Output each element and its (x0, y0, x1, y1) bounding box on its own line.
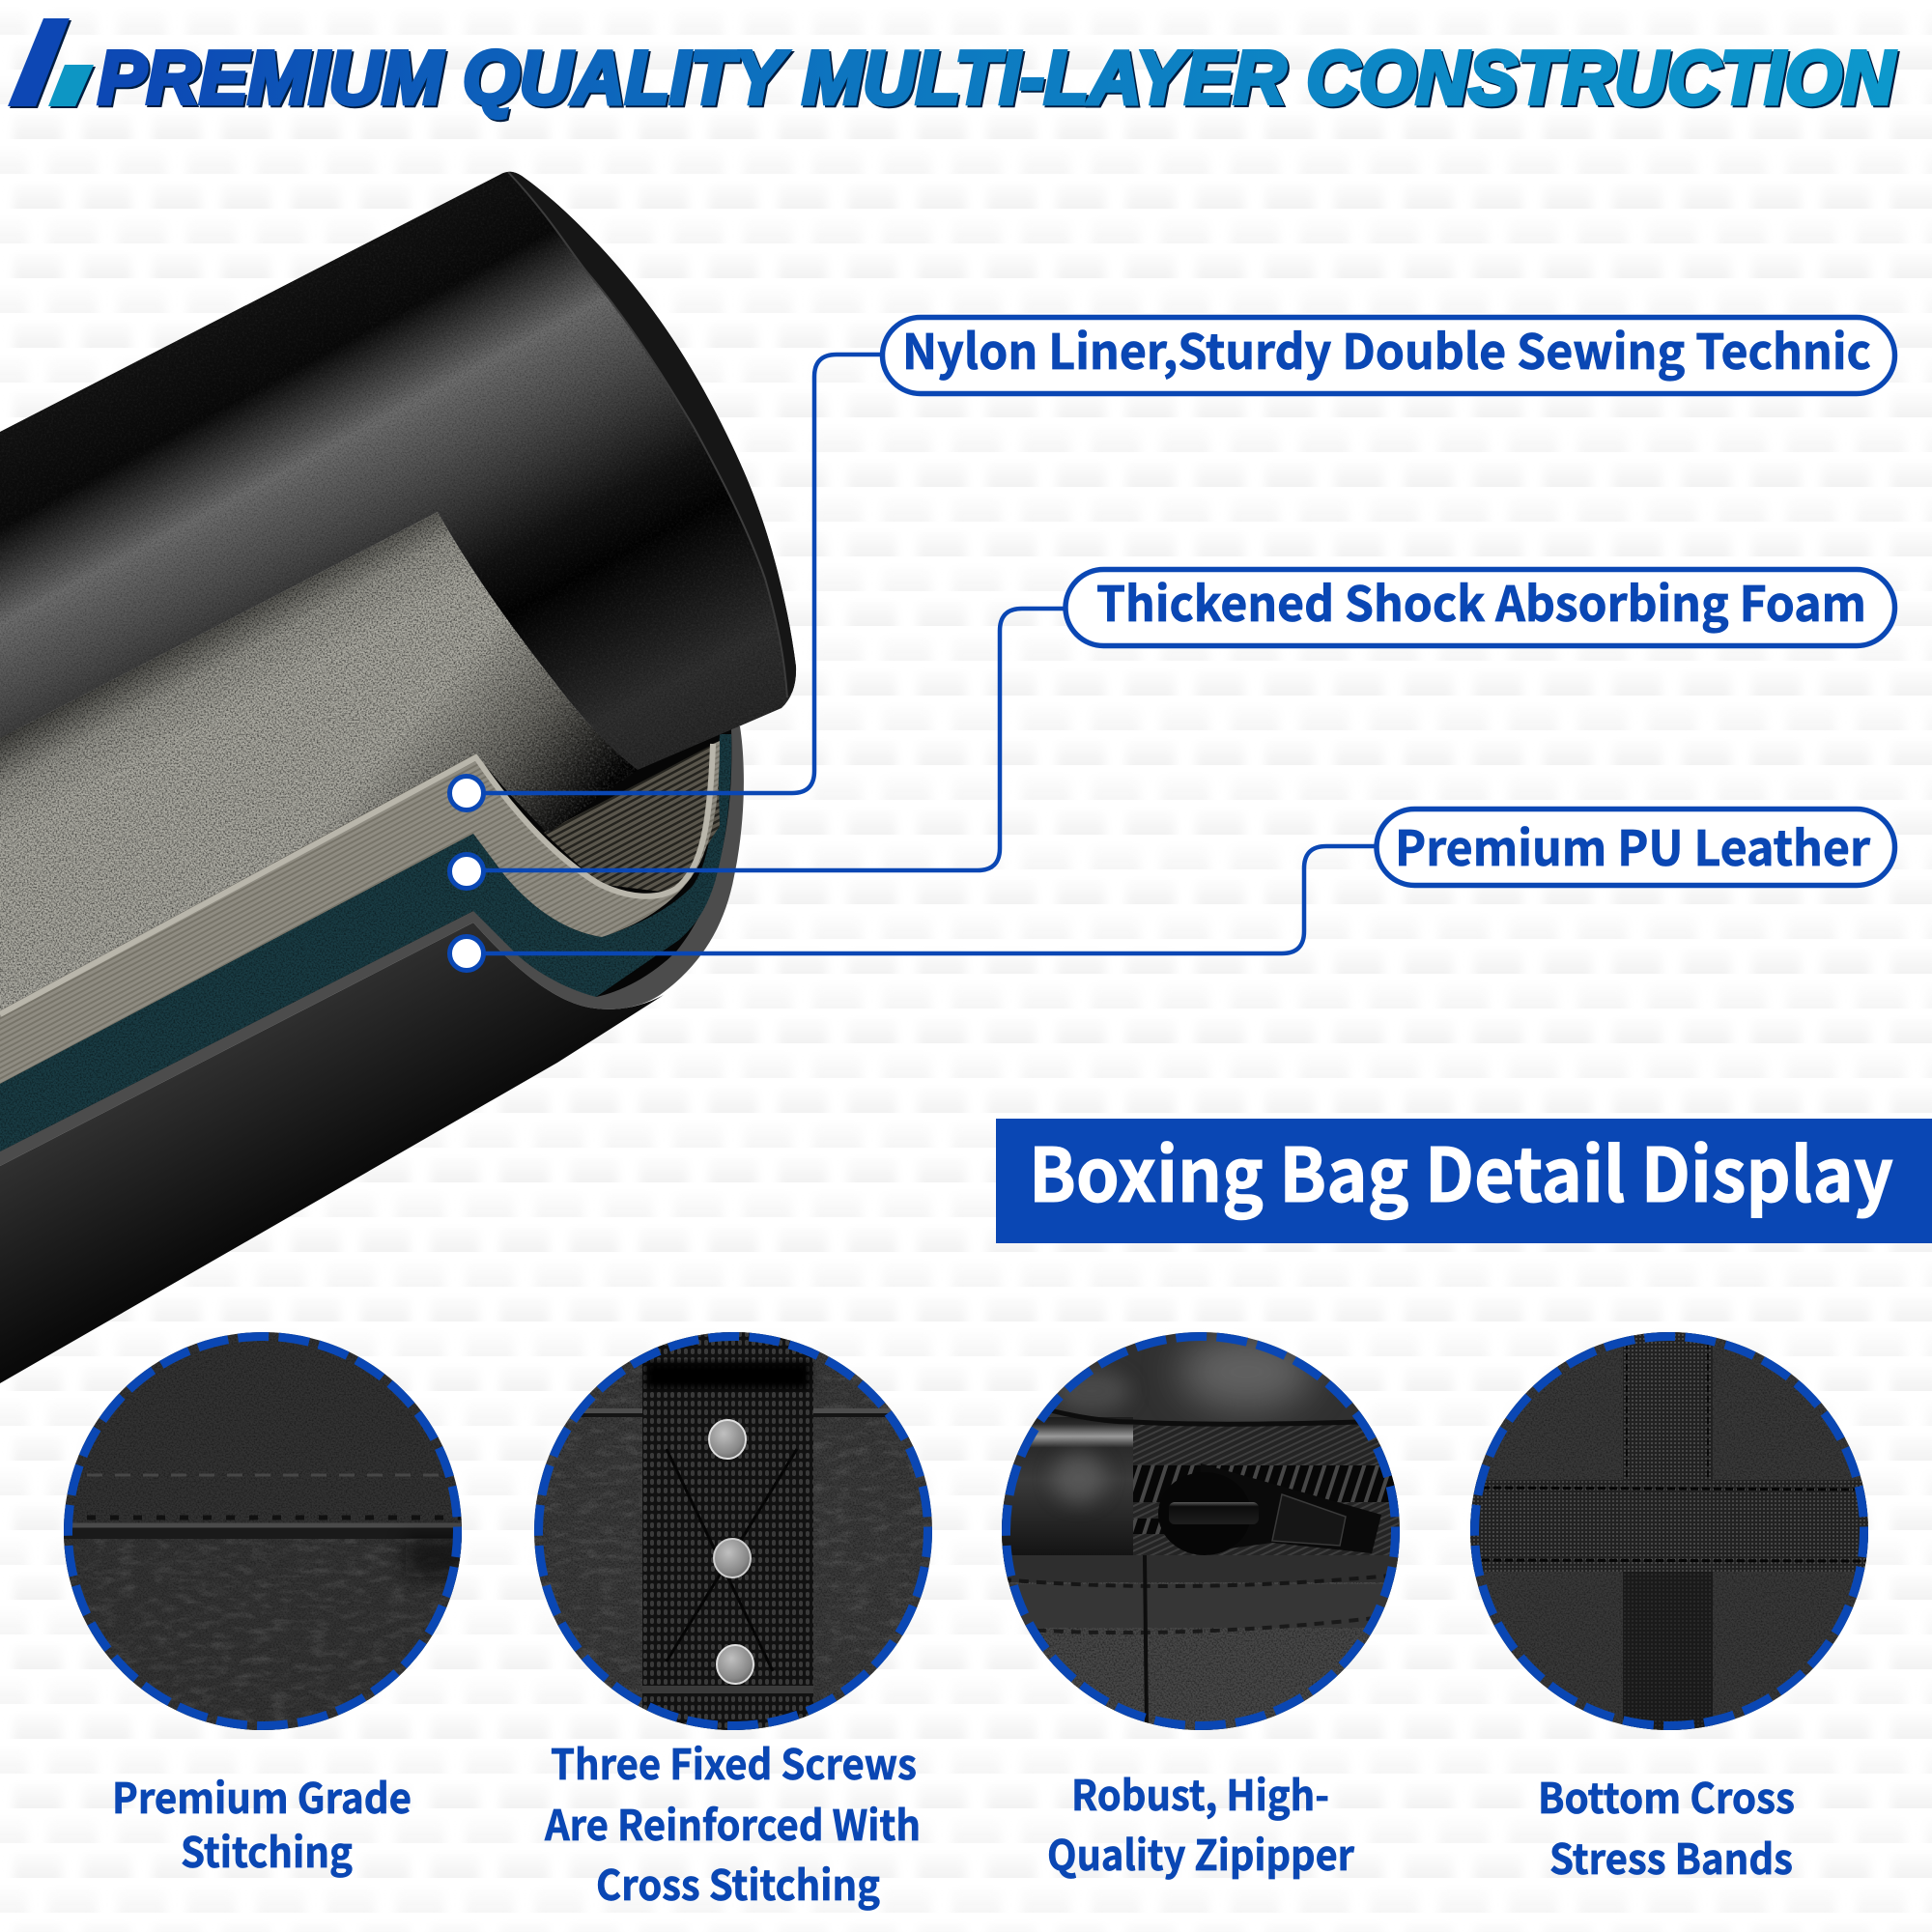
detail photo: stitching (64, 1332, 473, 1730)
caption: three fixed screws: Three Fixed Screws (551, 1732, 917, 1792)
nylon liner edge highlight (0, 744, 713, 1014)
nylon liner striped layer (0, 741, 720, 1084)
callout: nylon liner: Nylon Liner,Sturdy Double Sewing Technic (902, 314, 1871, 384)
caption: zipper (1047, 1763, 1354, 1883)
caption: zipper: Quality Zipipper (1047, 1823, 1354, 1883)
fuzzy grey inner lining (0, 502, 657, 1024)
caption: bottom cross stress bands (1538, 1766, 1795, 1887)
outer PU leather rim (0, 726, 744, 1166)
caption: zipper: Robust, High- (1071, 1763, 1329, 1823)
title (8, 18, 1896, 120)
detail photo: zipper (1002, 1332, 1400, 1730)
caption: three fixed screws: Are Reinforced With (544, 1793, 921, 1853)
inner dark base (0, 729, 731, 1151)
rivet 1 (709, 1420, 746, 1459)
icon: title accent bars (8, 18, 94, 106)
caption: premium grade stitching: Premium Grade (112, 1766, 412, 1826)
caption: three fixed screws (544, 1732, 921, 1913)
rivet 3 (717, 1645, 753, 1684)
top leather sleeve (0, 164, 807, 782)
caption: three fixed screws: Cross Stitching (596, 1853, 880, 1913)
marker dot: foam (450, 854, 483, 889)
lining interior stripes (544, 742, 720, 894)
detail photo: cross stress bands (1470, 1332, 1868, 1730)
bottom leather body (0, 923, 664, 1383)
detail photo: fixed screws (534, 1332, 932, 1730)
callout: foam: Thickened Shock Absorbing Foam (1096, 566, 1866, 636)
thickened foam teal layer (0, 724, 744, 1169)
caption: bottom cross stress bands: Stress Bands (1549, 1827, 1793, 1887)
marker dot: liner (450, 777, 483, 810)
rivet 2 (714, 1539, 751, 1577)
caption: premium grade stitching: Stitching (181, 1820, 353, 1880)
bag cross-section illustration (0, 164, 807, 1383)
connector: liner callout line (467, 355, 883, 793)
title text: PREMIUM QUALITY MULTI-LAYER CONSTRUCTION (98, 35, 1896, 120)
marker dot: leather (450, 937, 483, 970)
caption: premium grade stitching (112, 1766, 412, 1880)
connector: leather callout line (467, 846, 1378, 953)
caption: bottom cross stress bands: Bottom Cross (1538, 1766, 1795, 1826)
callout: PU leather: Premium PU Leather (1395, 810, 1870, 880)
connector: foam callout line (467, 609, 1066, 870)
banner: detail display heading: Boxing Bag Detail Display (1029, 1117, 1893, 1224)
